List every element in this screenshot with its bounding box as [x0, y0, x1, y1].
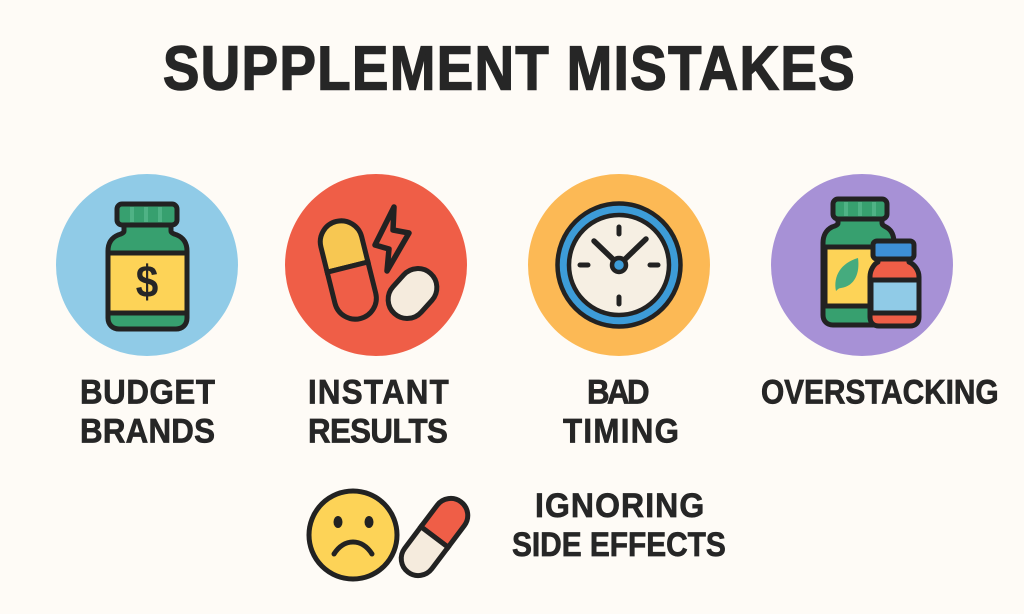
icon: red and cream capsule	[394, 492, 475, 582]
label: budget brands: BRANDS	[80, 411, 215, 450]
panel: ignoring side effects	[309, 486, 726, 582]
label: ignoring side effects	[512, 486, 726, 563]
icon: round tablet	[380, 261, 445, 326]
icon circle: purple	[771, 174, 953, 356]
label: ignoring side effects: IGNORING	[535, 486, 704, 524]
panel: budget brands	[56, 174, 238, 450]
label: budget brands	[80, 372, 215, 450]
icon: lightning bolt	[375, 207, 409, 271]
icon: green bottle with dollar label	[108, 204, 187, 329]
icon: small red bottle	[870, 241, 919, 326]
icon circle: red	[285, 174, 467, 356]
icon: sad face	[309, 491, 397, 579]
label: ignoring side effects: SIDE EFFECTS	[512, 525, 726, 563]
label: overstacking: OVERSTACKING	[761, 373, 999, 411]
icon: capsule	[316, 216, 381, 324]
label: instant results: INSTANT	[308, 372, 449, 411]
icon circle: orange	[528, 174, 710, 356]
icon: large green bottle with leaf	[823, 199, 894, 325]
label: bad timing: TIMING	[563, 411, 679, 450]
label: instant results	[308, 372, 449, 450]
title: SUPPLEMENT MISTAKES	[163, 34, 855, 103]
icon: clock	[558, 204, 680, 326]
icon: green bottle with dollar label: $	[136, 257, 158, 308]
panel: instant results	[285, 174, 467, 450]
label: bad timing	[563, 372, 679, 450]
label: budget brands: BUDGET	[80, 372, 215, 411]
panel: overstacking	[761, 174, 999, 411]
panel: bad timing	[528, 174, 710, 450]
icon circle: light blue	[56, 174, 238, 356]
label: bad timing: BAD	[587, 372, 650, 411]
label: instant results: RESULTS	[308, 411, 448, 450]
